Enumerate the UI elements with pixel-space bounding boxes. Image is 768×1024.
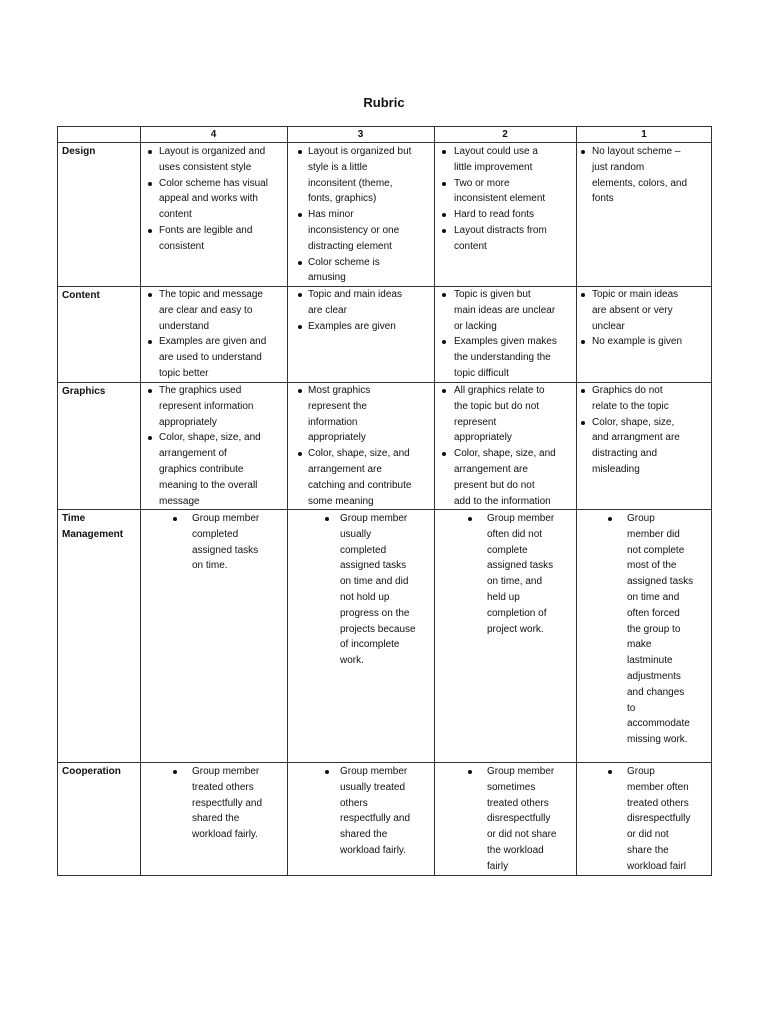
row: graphics: The graphics used — [159, 385, 241, 396]
row: graphics: All graphics relate to — [454, 385, 545, 396]
row: design: content — [454, 241, 487, 252]
row: content: topic better — [159, 368, 208, 379]
row: graphics: represent the — [308, 401, 367, 412]
row: design: style is a little — [308, 162, 367, 173]
row: design: Layout is organized but — [308, 146, 411, 157]
row: content: understand — [159, 321, 209, 332]
row: graphics: relate to the topic — [592, 401, 669, 412]
row: time management: project work. — [487, 624, 544, 635]
row: graphics: Most graphics — [308, 385, 370, 396]
row: graphics: represent information — [159, 401, 254, 412]
row: cooperation — [173, 766, 690, 872]
row: time management: adjustments — [627, 671, 681, 682]
row: content: or lacking — [454, 321, 497, 332]
row: content: No example is given — [592, 336, 682, 347]
row: design: little improvement — [454, 162, 532, 173]
row: graphics: appropriately — [159, 417, 217, 428]
row: design: Layout could use a — [454, 146, 538, 157]
row: design: Has minor — [308, 209, 354, 220]
row: design: elements, colors, and — [592, 178, 687, 189]
row: cooperation: or did not share — [487, 829, 556, 840]
row: time management: most of the — [627, 560, 676, 571]
header row: 4 — [211, 129, 216, 140]
row: cooperation: sometimes — [487, 782, 535, 793]
row: content: Topic or main ideas — [592, 289, 678, 300]
header row: 1 — [641, 129, 647, 140]
row: graphics: Graphics do not — [592, 385, 663, 396]
row: time management: of incomplete — [340, 639, 399, 650]
row: cooperation: the workload — [487, 845, 544, 856]
row: design: Two or more — [454, 178, 510, 189]
row: design: Color scheme has visual — [159, 178, 268, 189]
row: graphics — [148, 385, 680, 507]
row: design: No layout scheme – — [592, 146, 680, 157]
row: content: Examples are given and — [159, 336, 266, 347]
row: graphics: some meaning — [308, 496, 374, 507]
row: content: are used to understand — [159, 352, 262, 363]
row: graphics: Color, shape, size, — [592, 417, 674, 428]
row: cooperation: respectfully and — [340, 813, 410, 824]
row labels: Management — [62, 529, 123, 540]
row: graphics: add to the information — [454, 496, 551, 507]
row: graphics: message — [159, 496, 200, 507]
row: graphics: Color, shape, size, and — [454, 448, 556, 459]
row: time management: assigned tasks — [487, 560, 553, 571]
title: Rubric — [363, 95, 405, 110]
row: cooperation: others — [340, 798, 368, 809]
row: design: fonts, graphics) — [308, 193, 376, 204]
row: cooperation: Group member — [192, 766, 259, 777]
row: cooperation: treated others — [487, 798, 549, 809]
row: cooperation: fairly — [487, 861, 508, 872]
row: design: Color scheme is — [308, 257, 380, 268]
row: graphics: represent — [454, 417, 496, 428]
row: cooperation: usually treated — [340, 782, 405, 793]
row: time management: progress on the — [340, 608, 410, 619]
row: cooperation: workload fairl — [627, 861, 686, 872]
row: design: inconsistency or one — [308, 225, 399, 236]
row: design: fonts — [592, 193, 614, 204]
row: design: inconsitent (theme, — [308, 178, 392, 189]
row: graphics: misleading — [592, 464, 640, 475]
row: graphics: distracting and — [592, 448, 657, 459]
row: time management: complete — [487, 545, 528, 556]
header row — [210, 129, 647, 140]
row: content: main ideas are unclear — [454, 305, 555, 316]
row: graphics: catching and contribute — [308, 480, 411, 491]
row: graphics: meaning to the overall — [159, 480, 257, 491]
header row: 3 — [358, 129, 363, 140]
row: design: Layout is organized and — [159, 146, 265, 157]
row: time management: usually — [340, 529, 371, 540]
row: cooperation: treated others — [627, 798, 689, 809]
row: graphics: information — [308, 417, 357, 428]
row: design: Hard to read fonts — [454, 209, 534, 220]
row: graphics: arrangement are — [308, 464, 382, 475]
row: time management: lastminute — [627, 655, 673, 666]
row: time management: on time and did — [340, 576, 408, 587]
row: time management — [173, 513, 693, 745]
row: time management: accommodate — [627, 718, 690, 729]
row: graphics: arrangement of — [159, 448, 227, 459]
row: content: Examples given makes — [454, 336, 557, 347]
row: graphics: present but do not — [454, 480, 535, 491]
row: cooperation: share the — [627, 845, 669, 856]
row: cooperation: shared the — [340, 829, 387, 840]
row: time management: Group member — [340, 513, 407, 524]
row: content: the understanding the — [454, 352, 551, 363]
row: time management: and changes — [627, 687, 684, 698]
row: graphics: and arrangment are — [592, 432, 680, 443]
row: graphics: the topic but do not — [454, 401, 539, 412]
row: time management: not hold up — [340, 592, 390, 603]
row: time management: Group member — [192, 513, 259, 524]
row: design — [148, 146, 687, 283]
row: time management: held up — [487, 592, 520, 603]
row: time management: work. — [340, 655, 364, 666]
row: cooperation: or did not — [627, 829, 669, 840]
row: time management: Group member — [487, 513, 554, 524]
row: content: Topic and main ideas — [308, 289, 402, 300]
row: content: Topic is given but — [454, 289, 531, 300]
row: design: distracting element — [308, 241, 392, 252]
row labels — [62, 146, 123, 777]
row: content: unclear — [592, 321, 625, 332]
row: content — [148, 289, 682, 379]
row: content: topic difficult — [454, 368, 509, 379]
row: time management: assigned tasks — [340, 560, 406, 571]
row: time management: make — [627, 639, 651, 650]
row labels: Cooperation — [62, 766, 121, 777]
row labels: Graphics — [62, 386, 105, 397]
row: cooperation: workload fairly. — [340, 845, 406, 856]
row: cooperation: shared the — [192, 813, 239, 824]
row: graphics: arrangement are — [454, 464, 528, 475]
row: cooperation: Group member — [340, 766, 407, 777]
row: graphics: appropriately — [308, 432, 366, 443]
row: time management: completion of — [487, 608, 546, 619]
row: cooperation: disrespectfully — [627, 813, 690, 824]
row: design: Layout distracts from — [454, 225, 547, 236]
row: design: Fonts are legible and — [159, 225, 252, 236]
row labels: Content — [62, 290, 100, 301]
row: content: Examples are given — [308, 321, 396, 332]
row: design: uses consistent style — [159, 162, 251, 173]
row: content: are clear and easy to — [159, 305, 252, 316]
row: graphics: Color, shape, size, and — [159, 432, 261, 443]
row labels: Time — [62, 513, 85, 524]
row: graphics: graphics contribute — [159, 464, 244, 475]
row: cooperation: Group member — [487, 766, 554, 777]
row: time management: on time. — [192, 560, 228, 571]
row: time management: on time and — [627, 592, 679, 603]
row: design: content — [159, 209, 192, 220]
row: time management: not complete — [627, 545, 684, 556]
row: content: The topic and message — [159, 289, 263, 300]
row: time management: projects because — [340, 624, 416, 635]
row: design: inconsistent element — [454, 193, 545, 204]
row: time management: member did — [627, 529, 680, 540]
row: time management: Group — [627, 513, 655, 524]
row: content: are absent or very — [592, 305, 673, 316]
row: time management: assigned tasks — [627, 576, 693, 587]
row: design: appeal and works with — [159, 193, 258, 204]
row: time management: completed — [192, 529, 238, 540]
row labels: Design — [62, 146, 95, 157]
row: cooperation: workload fairly. — [192, 829, 258, 840]
row: design: just random — [592, 162, 644, 173]
row: time management: missing work. — [627, 734, 688, 745]
row: cooperation: member often — [627, 782, 689, 793]
row: cooperation: disrespectfully — [487, 813, 550, 824]
row: time management: often forced — [627, 608, 680, 619]
row: time management: on time, and — [487, 576, 542, 587]
row: cooperation: Group — [627, 766, 655, 777]
row: graphics: appropriately — [454, 432, 512, 443]
row: time management: often did not — [487, 529, 542, 540]
row: cooperation: respectfully and — [192, 798, 262, 809]
row: graphics: Color, shape, size, and — [308, 448, 410, 459]
row: time management: assigned tasks — [192, 545, 258, 556]
header row: 2 — [502, 129, 508, 140]
row: design: amusing — [308, 272, 346, 283]
row: time management: completed — [340, 545, 386, 556]
row: design: consistent — [159, 241, 204, 252]
row: time management: the group to — [627, 624, 680, 635]
row: cooperation: treated others — [192, 782, 254, 793]
row: content: are clear — [308, 305, 347, 316]
row: time management: to — [627, 703, 635, 714]
